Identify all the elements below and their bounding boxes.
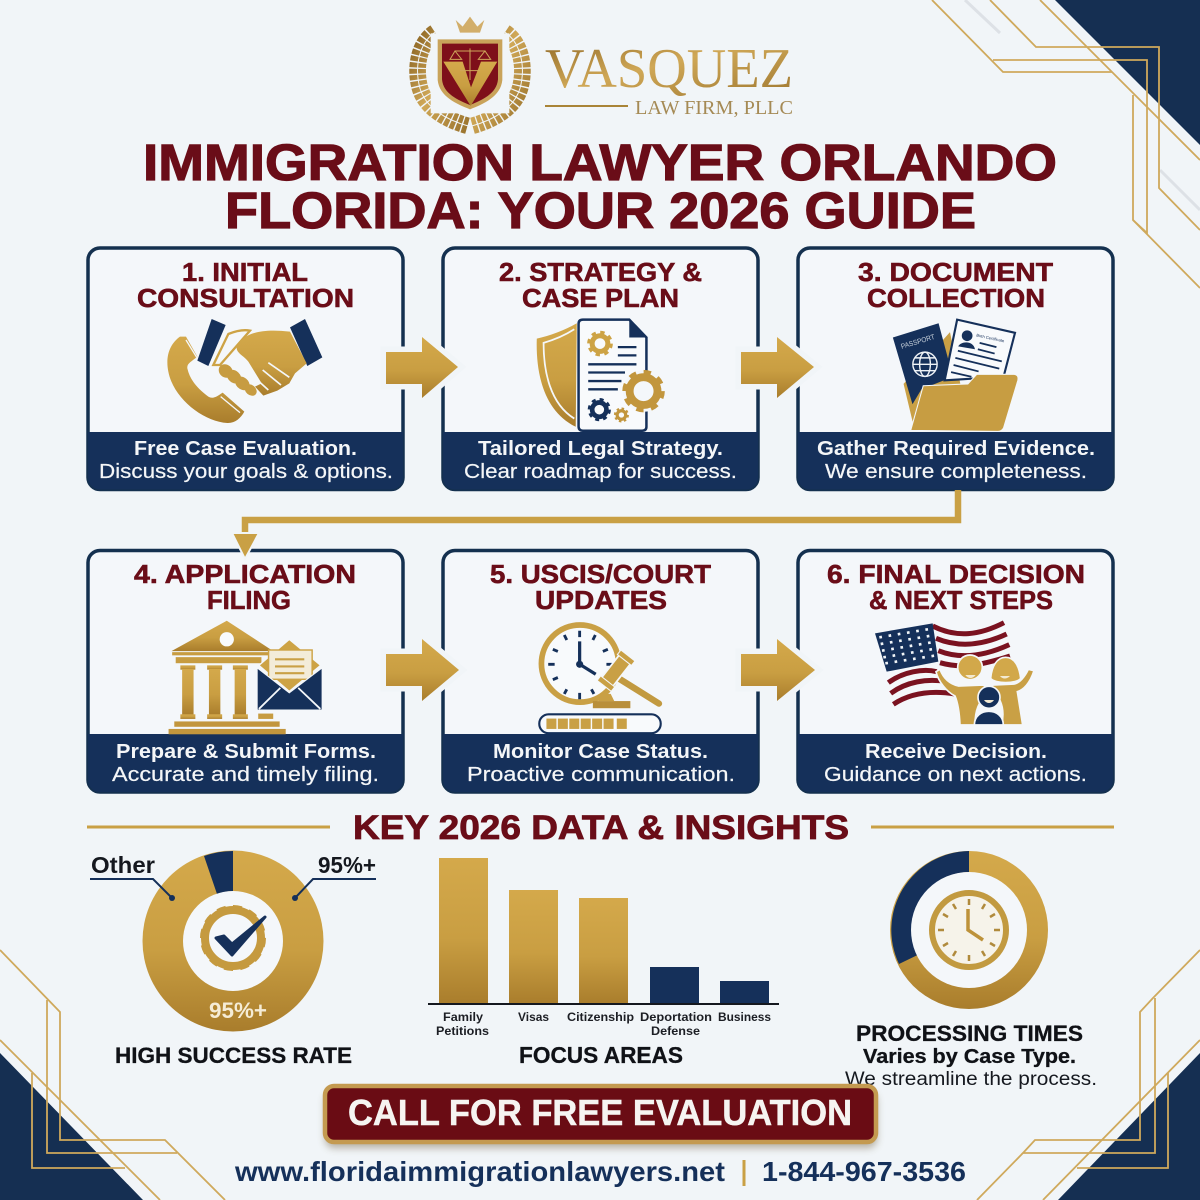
step 5 description — [467, 741, 735, 786]
step 4 heading — [134, 559, 356, 615]
icon: phone and handshake — [167, 319, 322, 423]
value inside donut: 95%+ — [209, 998, 267, 1023]
icon: clock — [932, 893, 1006, 967]
chart caption: high success rate: HIGH SUCCESS RATE — [115, 1043, 352, 1068]
step 2 heading: 2. STRATEGY & — [499, 257, 702, 287]
step 6 heading: 6. FINAL DECISION — [827, 559, 1085, 589]
icon: check badge — [202, 907, 265, 969]
step 4 heading: 4. APPLICATION — [134, 559, 356, 589]
arrow: step 5 to step 6 — [741, 639, 815, 701]
title — [143, 134, 1057, 239]
text block: processing times — [845, 1021, 1097, 1090]
logo — [418, 17, 793, 126]
callout: 95 percent: 95%+ — [318, 852, 376, 878]
step 4 description — [112, 741, 379, 786]
bar labels: Citizenship — [567, 1010, 634, 1024]
contact line: www.floridaimmigrationlawyers.net — [234, 1156, 725, 1187]
title: IMMIGRATION LAWYER ORLANDO — [143, 134, 1057, 191]
arrow: step 2 to step 3 — [741, 337, 814, 398]
step 4 heading: FILING — [207, 585, 291, 615]
step 1 description: Free Case Evaluation. — [134, 438, 357, 460]
step 1 heading — [137, 257, 354, 313]
panel: step 1 initial consultation — [88, 248, 403, 490]
corner decoration: bottom right — [977, 950, 1200, 1200]
chart: high success rate donut — [90, 850, 376, 1032]
step 2 description — [464, 438, 737, 483]
panel: step 2 strategy and case plan — [443, 248, 758, 490]
step 3 heading: 3. DOCUMENT — [858, 257, 1053, 287]
step 3 heading: COLLECTION — [867, 283, 1045, 313]
step 5 description: Monitor Case Status. — [493, 741, 708, 763]
panel: step 4 application filing — [88, 550, 403, 792]
logo emblem — [418, 17, 522, 126]
firm subtitle: LAW FIRM, PLLC — [635, 97, 793, 119]
step 6 heading — [827, 559, 1085, 615]
step 3 description: Gather Required Evidence. — [817, 438, 1095, 460]
title: FLORIDA: YOUR 2026 GUIDE — [225, 182, 976, 239]
icon: clock, gavel and progress bar — [539, 625, 661, 733]
call to action button — [325, 1086, 877, 1148]
step 5 heading: 5. USCIS/COURT — [490, 559, 711, 589]
step 5 heading: UPDATES — [535, 585, 667, 615]
callout: other — [90, 852, 175, 901]
arrow: step 4 to step 5 — [386, 639, 459, 701]
step 1 heading: CONSULTATION — [137, 283, 354, 313]
step 2 heading: CASE PLAN — [522, 283, 679, 313]
text block: processing times: Varies by Case Type. — [863, 1046, 1076, 1068]
bar labels: Visas — [518, 1010, 549, 1024]
step 1 description — [99, 438, 393, 483]
icon: passport, certificate and folder — [893, 320, 1018, 431]
text block: processing times: PROCESSING TIMES — [856, 1021, 1083, 1046]
step 1 heading: 1. INITIAL — [182, 257, 308, 287]
contact line — [234, 1156, 966, 1187]
step 2 description: Tailored Legal Strategy. — [478, 438, 723, 460]
step 4 description: Prepare & Submit Forms. — [116, 741, 376, 763]
chart caption: focus areas: FOCUS AREAS — [519, 1042, 683, 1068]
bar labels: Family — [443, 1010, 483, 1024]
bar labels: Deportation — [640, 1010, 712, 1024]
bar labels: Defense — [651, 1024, 700, 1038]
callout: other: Other — [91, 852, 155, 878]
step 3 description: We ensure completeness. — [825, 461, 1087, 483]
firm name: VASQUEZ — [545, 38, 793, 100]
section heading: key data: KEY 2026 DATA & INSIGHTS — [353, 809, 849, 847]
step 3 description — [817, 438, 1095, 483]
step 1 description: Discuss your goals & options. — [99, 461, 393, 483]
step 6 description — [824, 741, 1087, 786]
step 4 description: Accurate and timely filing. — [112, 764, 379, 786]
step 5 description: Proactive communication. — [467, 764, 735, 786]
step 6 heading: & NEXT STEPS — [869, 585, 1053, 615]
icon: American flag and family — [875, 623, 1034, 725]
chart: processing times donut — [890, 851, 1048, 1009]
bar labels — [436, 1010, 771, 1038]
step 5 heading — [490, 559, 711, 615]
bar labels: Business — [718, 1010, 771, 1024]
contact line: 1-844-967-3536 — [762, 1156, 966, 1187]
icon: shield, document and gears — [537, 320, 664, 431]
step 2 heading — [499, 257, 702, 313]
step 6 description: Receive Decision. — [865, 741, 1047, 763]
icon: passport, certificate and folder: PASSPORT — [900, 333, 936, 351]
arrow: step 1 to step 2 — [386, 337, 458, 398]
step 3 heading — [858, 257, 1053, 313]
corner decoration: top right — [932, 0, 1200, 288]
panel: step 6 final decision and next steps — [798, 550, 1113, 792]
bar labels: Petitions — [436, 1024, 489, 1038]
call to action button: CALL FOR FREE EVALUATION — [348, 1092, 852, 1133]
callout: 95 percent — [292, 852, 376, 901]
icon: passport, certificate and folder: Birth Certificate — [976, 333, 1005, 343]
arrow: connector from step 3 to step 4 — [232, 490, 958, 559]
icon: courthouse and envelope — [169, 621, 322, 734]
step 2 description: Clear roadmap for success. — [464, 461, 737, 483]
chart: focus areas bar chart — [428, 858, 779, 1038]
corner decoration: bottom left — [0, 950, 225, 1200]
text block: processing times: We streamline the process. — [845, 1069, 1097, 1090]
step 6 description: Guidance on next actions. — [824, 764, 1087, 786]
panel: step 5 uscis and court updates — [443, 550, 758, 792]
panel: step 3 document collection — [798, 248, 1113, 490]
